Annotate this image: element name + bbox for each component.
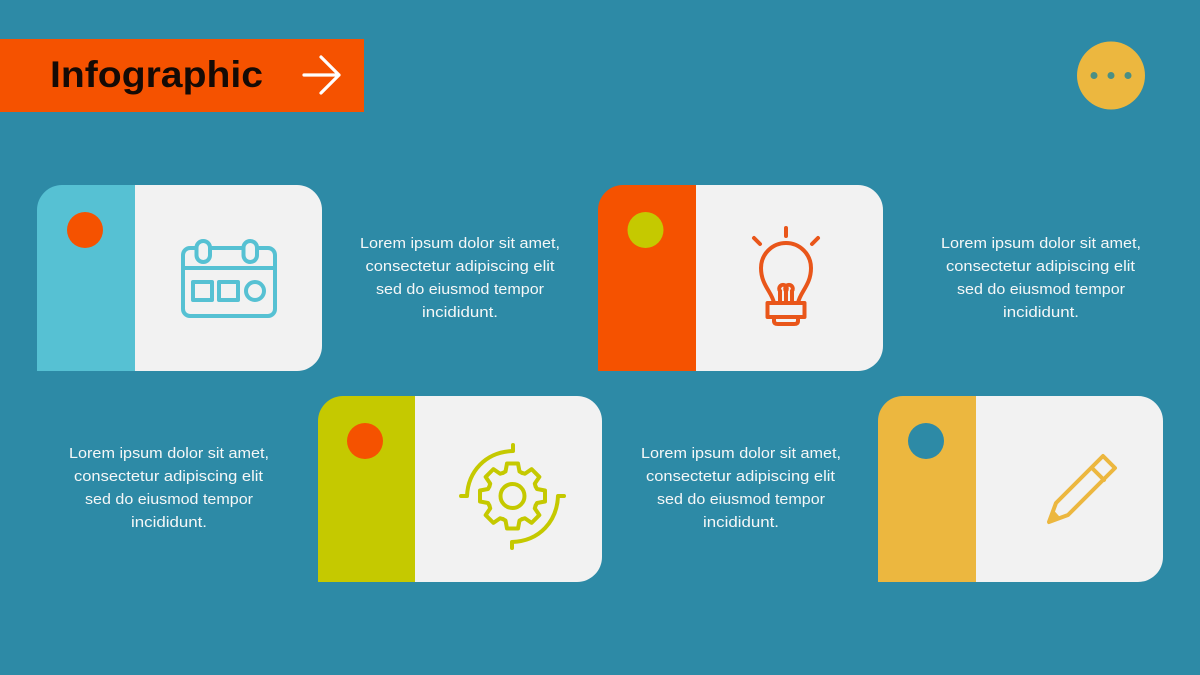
text block: light bulb: consectetur adipiscing elit xyxy=(946,258,1136,275)
text block: pencil: Lorem ipsum dolor sit amet, xyxy=(641,445,841,462)
panel: light bulb card xyxy=(598,185,883,371)
panel: calendar card xyxy=(37,185,322,371)
text block: light bulb: Lorem ipsum dolor sit amet, xyxy=(941,235,1141,252)
arrow xyxy=(304,57,339,93)
text block: gear xyxy=(69,445,269,531)
text block: calendar: consectetur adipiscing elit xyxy=(366,258,555,275)
icon: light bulb xyxy=(754,228,818,324)
text block: gear: incididunt. xyxy=(131,514,207,531)
title: Infographic xyxy=(50,54,263,95)
text block: calendar: Lorem ipsum dolor sit amet, xyxy=(360,235,560,252)
text block: calendar: sed do eiusmod tempor xyxy=(376,281,544,298)
text block: calendar: incididunt. xyxy=(422,304,498,321)
text block: pencil: incididunt. xyxy=(703,514,779,531)
icon: pencil xyxy=(1049,456,1115,522)
text block: gear: Lorem ipsum dolor sit amet, xyxy=(69,445,269,462)
text block: light bulb: sed do eiusmod tempor xyxy=(957,281,1125,298)
text block: pencil: sed do eiusmod tempor xyxy=(657,491,825,508)
text block: gear: consectetur adipiscing elit xyxy=(74,468,264,485)
text block: pencil: consectetur adipiscing elit xyxy=(646,468,836,485)
text block: light bulb: incididunt. xyxy=(1003,304,1079,321)
icon: calendar xyxy=(183,241,275,316)
header banner xyxy=(0,39,364,112)
text block: gear: sed do eiusmod tempor xyxy=(85,491,253,508)
text block: pencil xyxy=(641,445,841,531)
icon: gear with arrows xyxy=(461,445,564,548)
text block: light bulb xyxy=(941,235,1141,321)
panel: pencil card xyxy=(878,396,1163,582)
text block: calendar xyxy=(360,235,560,321)
menu badge xyxy=(1077,42,1145,110)
panel: gear card xyxy=(318,396,602,582)
